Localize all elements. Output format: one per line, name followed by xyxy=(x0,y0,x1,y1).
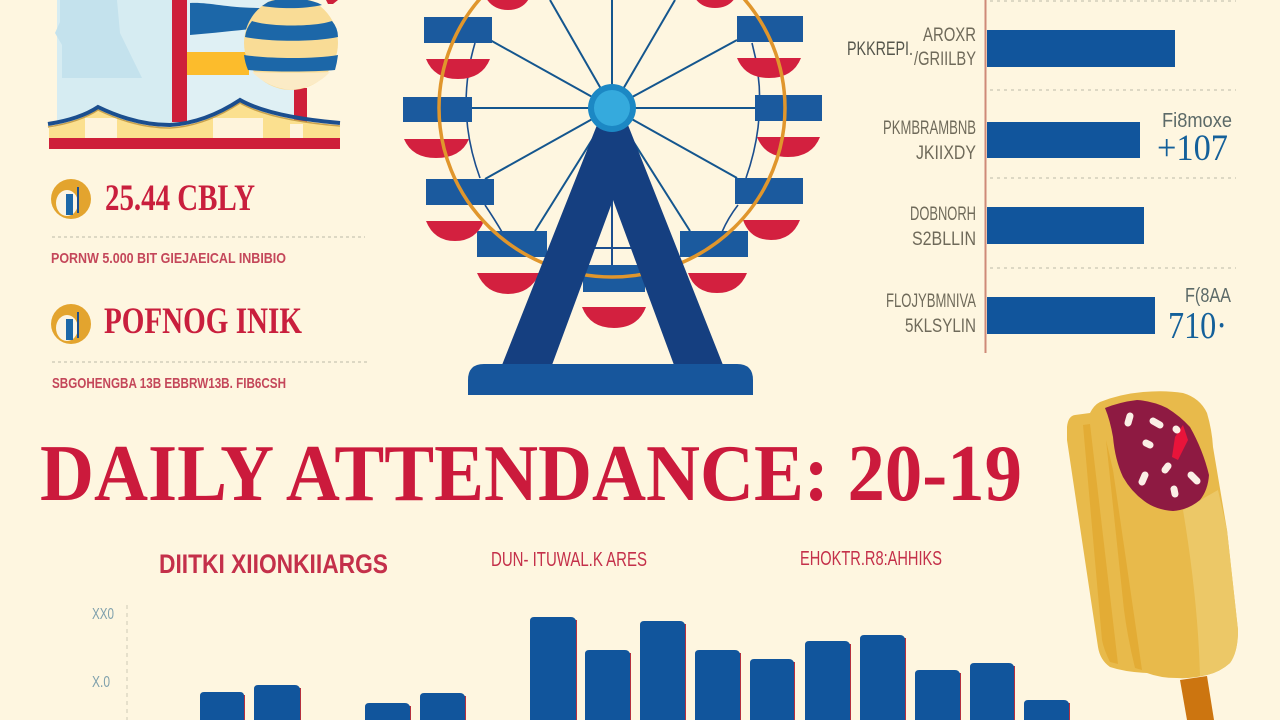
a-frame support xyxy=(502,125,723,365)
row labels: JKIIXDY xyxy=(916,143,976,164)
row labels: PKMBRAMBNB xyxy=(883,118,976,139)
illustration: ice cream bar xyxy=(1067,391,1238,720)
sprinkles xyxy=(1128,416,1197,494)
row labels: DOBNORH xyxy=(910,204,976,225)
illustration: fairground scene xyxy=(48,0,340,149)
y axis labels xyxy=(92,606,114,691)
roof band xyxy=(48,100,340,149)
base xyxy=(468,364,753,395)
stat value: POFNOG INIK xyxy=(104,301,302,342)
dark creases xyxy=(1083,424,1142,670)
stick xyxy=(1180,676,1214,720)
column shadows xyxy=(202,620,1070,720)
orange outer ring xyxy=(439,0,785,277)
callout: upper: +107 xyxy=(1157,128,1228,169)
stat caption: PORNW 5.000 BIT GIEJAEICAL INBIBIO xyxy=(51,250,286,267)
subheading 1: DIITKI XIIONKIIARGS xyxy=(159,549,388,579)
callout: upper: Fi8moxe xyxy=(1162,110,1232,132)
spokes xyxy=(466,0,760,268)
row labels: /GRIILBY xyxy=(914,49,976,70)
row labels: S2BLLIN xyxy=(912,229,976,250)
gondolas xyxy=(403,0,822,328)
column chart xyxy=(92,605,1070,720)
bars xyxy=(987,30,1175,334)
title: DAILY ATTENDANCE: 20-19 xyxy=(40,430,1022,518)
callout: lower xyxy=(1168,285,1232,347)
callout: lower: 710· xyxy=(1168,305,1227,347)
row labels xyxy=(847,25,976,337)
light side xyxy=(1183,490,1238,676)
row labels: AROXR xyxy=(923,25,976,46)
callout: upper xyxy=(1157,110,1232,169)
chocolate dip xyxy=(1105,400,1209,511)
icon: stat badge 2 xyxy=(51,304,91,344)
illustration: ferris wheel xyxy=(403,0,822,395)
subheading 2: DUN- ITUWAL.K ARES xyxy=(491,549,647,571)
icon: stat badge 1 xyxy=(51,179,91,219)
icon: striped balloon xyxy=(244,0,338,90)
bar chart: horizontal xyxy=(847,0,1236,353)
columns xyxy=(200,617,1069,720)
hub xyxy=(588,84,636,132)
row labels: 5KLSYLIN xyxy=(905,316,976,337)
bar body xyxy=(1067,391,1238,678)
row labels: PKKREPI. xyxy=(847,39,913,60)
stat 1 xyxy=(51,178,365,267)
y axis labels: XX0 xyxy=(92,606,114,623)
stat value: 25.44 CBLY xyxy=(105,178,255,219)
y axis labels: X.0 xyxy=(92,674,110,691)
stat 2 xyxy=(51,301,370,392)
row labels: FLOJYBMNIVA xyxy=(886,291,976,312)
callout: lower: F(8AA xyxy=(1185,285,1232,307)
subheading 3: EHOKTR.R8:AHHIKS xyxy=(800,548,942,570)
stat caption: SBGOHENGBA 13B EBBRW13B. FIB6CSH xyxy=(52,375,286,392)
